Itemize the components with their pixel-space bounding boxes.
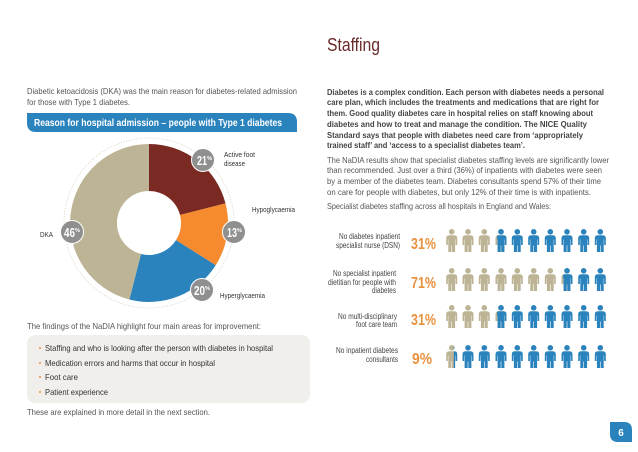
donut chart: reason for hospital admission xyxy=(60,138,246,308)
bullet: medication errors: Medication errors and harms that occur in hospital xyxy=(45,358,215,368)
label: active foot disease: disease xyxy=(224,159,245,168)
badge: 13% xyxy=(222,220,246,244)
label: hyperglycaemia: Hyperglycaemia xyxy=(220,291,266,300)
intro paragraph: DKA: for those with Type 1 diabetes. xyxy=(27,97,130,107)
badge: 21%: % xyxy=(207,156,213,162)
badge: 20%: 20 xyxy=(194,284,205,298)
page number tab xyxy=(610,422,632,442)
pictogram xyxy=(446,345,606,368)
slice: hypoglycaemia 13% xyxy=(176,203,228,265)
badge: 21% xyxy=(192,148,214,172)
row label: No multi-disciplinary xyxy=(338,312,397,321)
row label xyxy=(338,312,397,329)
pictogram xyxy=(446,268,606,291)
bullet: staffing: Staffing and who is looking after the person with diabetes in hospital xyxy=(45,343,273,353)
percentage: 71% xyxy=(411,275,436,292)
paragraph: NaDIA results: by a member of the diabetes team. Diabetes consultants spend 57% of their time xyxy=(327,176,601,186)
pictogram xyxy=(446,305,606,328)
row label: No specialist inpatient xyxy=(333,269,397,278)
row label: diabetes xyxy=(372,286,396,295)
text: findings intro: The findings of the NaDIA highlight four main areas for improvement: xyxy=(27,321,261,331)
pictogram xyxy=(446,229,606,252)
bullet: foot care: Foot care xyxy=(45,372,78,382)
row: no specialist inpatient dietitian 71% xyxy=(328,268,606,295)
bold paragraph: them. Good quality diabetes care in hospital relies on staff knowing about xyxy=(327,108,593,118)
percentage: 31% xyxy=(411,312,436,329)
percentage: 31% xyxy=(411,236,436,253)
badge: 46% xyxy=(60,220,84,244)
text: next section note: These are explained in more detail in the next section. xyxy=(27,407,210,417)
badge: 46%: % xyxy=(75,228,81,234)
row label: No inpatient diabetes xyxy=(336,346,398,355)
bold paragraph: Diabetes is a complex condition. Each person with diabetes needs a personal xyxy=(327,87,604,97)
paragraph: NaDIA results: The NaDIA results show that specialist diabetes staffing levels are significantly lower xyxy=(327,155,609,165)
row label: No diabetes inpatient xyxy=(339,232,401,241)
badge: 21%: 21 xyxy=(197,154,207,168)
chart heading banner xyxy=(27,113,297,132)
row label xyxy=(336,346,398,364)
text: staffing chart intro: Specialist diabetes staffing across all hospitals in England and Wales: xyxy=(327,201,551,211)
badge: 13%: 13 xyxy=(227,226,237,240)
slice: DKA 46% xyxy=(70,144,149,300)
badge: 46%: 46 xyxy=(64,226,75,240)
label: active foot disease: Active foot xyxy=(224,150,255,159)
row: no multi-disciplinary foot care team 31% xyxy=(338,305,606,329)
row label: foot care team xyxy=(356,320,397,329)
bold paragraph: Standard says that people with diabetes need care from ‘appropriately xyxy=(327,130,583,140)
bold paragraph: diabetes and how to treat and manage the condition. The NICE Quality xyxy=(327,119,587,129)
badge: 13%: % xyxy=(237,228,243,234)
label: hypoglycaemia: Hypoglycaemia xyxy=(252,205,296,214)
bold paragraph: care plan, which includes the treatments and medications that are right for xyxy=(327,97,600,107)
label: active foot disease xyxy=(224,150,255,168)
row label: consultants xyxy=(366,355,398,364)
label: DKA: DKA xyxy=(40,230,53,239)
bold paragraph: trained staff’ and ‘access to a specialist diabetes team’. xyxy=(327,140,525,150)
badge: 20%: % xyxy=(205,286,211,292)
title: Staffing xyxy=(327,35,380,55)
row label: specialist nurse (DSN) xyxy=(336,241,400,250)
row label: dietitian for people with xyxy=(328,278,396,287)
paragraph: NaDIA results: than recommended. Just over a third (36%) of inpatients with diabetes were seen xyxy=(327,165,602,175)
intro paragraph: DKA xyxy=(27,86,297,107)
chart heading banner: Reason for hospital admission – people with Type 1 diabetes xyxy=(34,117,282,129)
intro paragraph: DKA: Diabetic ketoacidosis (DKA) was the main reason for diabetes-related admission xyxy=(27,86,297,96)
panel: four improvement areas xyxy=(27,335,310,403)
paragraph: NaDIA results xyxy=(327,155,609,197)
badge: 20% xyxy=(190,278,214,302)
row: no diabetes inpatient specialist nurse 31% xyxy=(336,229,606,253)
row label xyxy=(336,232,401,250)
slice: hyperglycaemia 20% xyxy=(129,240,216,302)
row label xyxy=(328,269,397,295)
paragraph: NaDIA results: on care for people with diabetes, but only 12% of their time is with inpatients. xyxy=(327,187,591,197)
slice: active foot disease 21% xyxy=(149,144,226,215)
row: no inpatient diabetes consultants 9% xyxy=(336,345,606,368)
page number tab: 6 xyxy=(618,428,624,439)
bold paragraph xyxy=(327,87,604,150)
percentage: 9% xyxy=(412,351,432,368)
bullet: patient experience: Patient experience xyxy=(45,387,108,397)
